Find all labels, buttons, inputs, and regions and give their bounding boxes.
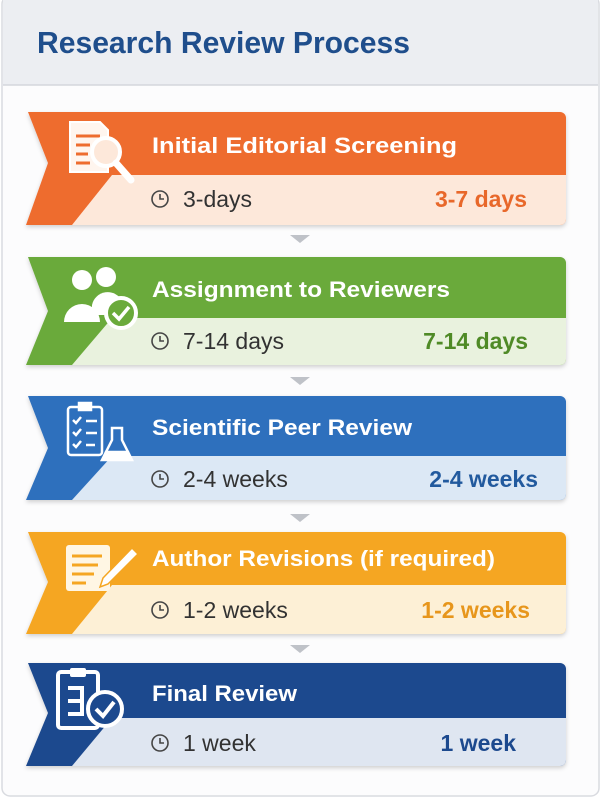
- card 5: Final Review: 1 week: [441, 730, 516, 756]
- card 2: Assignment to Reviewers: 7-14 days: [183, 328, 284, 354]
- card 2: Assignment to Reviewers: Assignment to Reviewers: [152, 277, 450, 302]
- icon: document with magnifier: [70, 122, 131, 180]
- card 1: Initial Editorial Screening: [26, 112, 566, 225]
- arrow: [290, 235, 310, 243]
- card 3: Scientific Peer Review: 2-4 weeks: [429, 466, 538, 492]
- icon: checklist and flask: [68, 403, 132, 460]
- card 4: Author Revisions: Author Revisions (if required): [152, 546, 495, 571]
- card 1: Initial Editorial Screening: Initial Editorial Screening: [152, 133, 457, 158]
- card 4: Author Revisions: 1-2 weeks: [421, 597, 530, 623]
- card 4: Author Revisions: [26, 532, 566, 634]
- icon: clipboard with check: [58, 668, 122, 728]
- icon: document with pencil: [66, 545, 138, 591]
- icon: people with check: [64, 267, 136, 328]
- card 5: Final Review: [26, 663, 566, 766]
- title: Research Review Process: [37, 25, 410, 60]
- card 3: Scientific Peer Review: Scientific Peer Review: [152, 415, 413, 440]
- card 3: Scientific Peer Review: 2-4 weeks: [183, 466, 288, 492]
- card 1: Initial Editorial Screening: 3-7 days: [435, 186, 527, 212]
- card 1: Initial Editorial Screening: 3-days: [183, 186, 252, 212]
- card 4: Author Revisions: 1-2 weeks: [183, 597, 288, 623]
- card 2: Assignment to Reviewers: 7-14 days: [423, 328, 528, 354]
- card 5: Final Review: Final Review: [152, 681, 298, 706]
- card 2: Assignment to Reviewers: [26, 257, 566, 365]
- card 3: Scientific Peer Review: [26, 396, 566, 500]
- card 5: Final Review: 1 week: [183, 730, 256, 756]
